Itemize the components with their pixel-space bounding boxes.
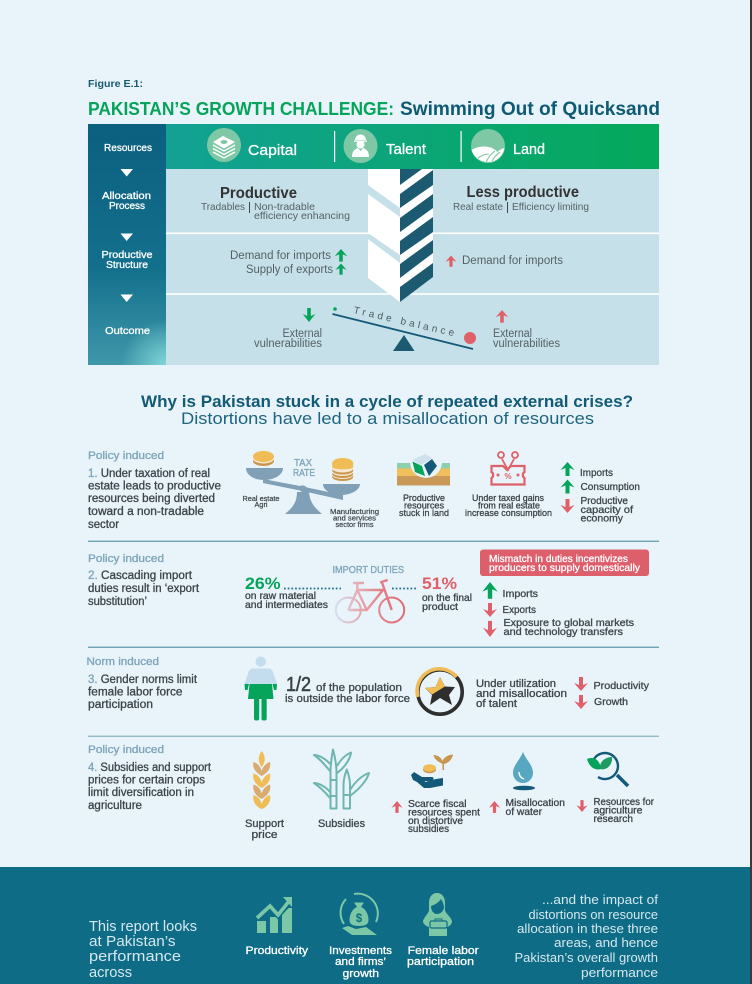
panel: section 3 gender norms bbox=[86, 656, 650, 720]
outcome: external vulnerabilities down: External bbox=[282, 328, 322, 340]
list: impacts of gender norms: Growth bbox=[594, 696, 628, 708]
label: subsidies: Subsidies bbox=[318, 818, 365, 830]
text: scarce fiscal resources: subsidies bbox=[408, 823, 449, 835]
heading: why stuck bbox=[141, 393, 633, 428]
text: gender norms description bbox=[88, 674, 198, 711]
icon: talent worker bbox=[344, 129, 378, 163]
outcome: external vulnerabilities up bbox=[493, 310, 560, 350]
icon: water drop bbox=[513, 752, 535, 790]
text: gender norms description: 3. Gender norms limit bbox=[88, 674, 198, 686]
heading: why stuck: Distortions have led to a misallocation of resources bbox=[181, 409, 594, 428]
icon: investments money bag bbox=[341, 894, 378, 935]
icon: tax rate scale: RATE bbox=[293, 467, 315, 479]
text: impact of distortions: performance bbox=[581, 966, 658, 980]
text: subsidies description: 4. Subsidies and support bbox=[88, 762, 212, 774]
text: this report looks: performance bbox=[89, 948, 181, 965]
stat: half of population: is outside the labor force bbox=[285, 693, 410, 705]
icon: tax rate scale: Manufacturing bbox=[330, 509, 379, 516]
panel: row backgrounds bbox=[166, 169, 659, 365]
text: impact of distortions bbox=[514, 893, 659, 980]
text: subsidies description: prices for certain crops bbox=[88, 774, 205, 786]
list: impacts of under taxation: Productive bbox=[580, 495, 628, 507]
text: resources for agriculture research: Resources for bbox=[594, 796, 654, 808]
heading: why stuck: Why is Pakistan stuck in a cycle of repeated external crises? bbox=[141, 393, 633, 411]
text: under taxation description: resources being diverted bbox=[88, 493, 215, 505]
list: impacts of under taxation: Consumption bbox=[580, 481, 640, 493]
text: this report looks bbox=[89, 918, 197, 981]
panel: process sidebar: Resources bbox=[104, 143, 152, 154]
label: support price bbox=[245, 818, 284, 841]
icon: investments money bag: $ bbox=[356, 913, 363, 925]
text: productive side: Non-tradable bbox=[254, 201, 315, 213]
text: this report looks: across bbox=[89, 964, 132, 981]
icon: star ring bbox=[417, 669, 462, 714]
label: investments and firms growth: growth bbox=[342, 968, 379, 980]
icon: capital money bbox=[207, 128, 241, 162]
list: impacts of gender norms bbox=[574, 677, 650, 709]
panel: process sidebar bbox=[88, 124, 166, 365]
icon: tax rate scale: sector firms bbox=[336, 522, 374, 529]
icon: land fields bbox=[471, 129, 505, 163]
text: resources for agriculture research: agriculture bbox=[594, 804, 643, 816]
stat: 26 percent bbox=[245, 574, 328, 611]
icon: bicycle bbox=[336, 580, 404, 622]
text: under utilization bbox=[476, 678, 567, 710]
icon: woman half filled bbox=[244, 656, 277, 720]
text: resources for agriculture research bbox=[576, 796, 654, 825]
callout: mismatch in duties: producers to supply domestically bbox=[489, 562, 641, 574]
icon: tax rate scale: Agri bbox=[254, 502, 268, 509]
chart: trade balance seesaw: Trade balance bbox=[352, 305, 456, 339]
text: subsidies description: agriculture bbox=[88, 800, 142, 812]
panel: process sidebar: Productive bbox=[102, 250, 153, 261]
label: female labor participation: Female labor bbox=[408, 945, 479, 957]
label: investments and firms growth: and firms’ bbox=[335, 956, 386, 968]
text: productive structure right: Demand for imports bbox=[462, 255, 563, 267]
text: impact of distortions: allocation in these three bbox=[517, 922, 658, 936]
icon: resources stuck in land: stuck in land bbox=[399, 508, 449, 519]
text: impact of distortions: Pakistan’s overall growth bbox=[514, 951, 658, 965]
tag: policy induced: Policy induced bbox=[88, 553, 164, 565]
stat: 51 percent: product bbox=[422, 602, 458, 613]
label: investments and firms growth: Investments bbox=[329, 945, 393, 957]
panel: process sidebar: Outcome bbox=[105, 326, 150, 337]
text: under taxation description: toward a non-tradable bbox=[88, 506, 204, 518]
outcome: external vulnerabilities down bbox=[254, 308, 322, 350]
text: scarce fiscal resources: Scarce fiscal bbox=[408, 798, 466, 810]
panel: footer band bbox=[0, 867, 752, 984]
text: productive structure left: Demand for imports bbox=[230, 250, 331, 262]
icon: wheat support price bbox=[253, 751, 270, 809]
title: PAKISTAN’S GROWTH CHALLENGE: bbox=[88, 99, 394, 119]
text: scarce fiscal resources: on distortive bbox=[408, 815, 463, 827]
title bbox=[88, 98, 660, 120]
label: import duties: IMPORT DUTIES bbox=[332, 565, 404, 576]
icon: female labor bbox=[423, 893, 452, 936]
icon: under taxed gains bbox=[465, 452, 552, 519]
text: impact of distortions: distortions on resource bbox=[528, 908, 658, 922]
text: misallocation of water bbox=[489, 797, 565, 818]
text: subsidies description bbox=[88, 762, 212, 812]
icon: resources stuck in land bbox=[397, 454, 450, 519]
icon: under taxed gains: increase consumption bbox=[465, 508, 552, 519]
label: productivity: Productivity bbox=[246, 945, 309, 957]
text: less productive side: Real estate bbox=[453, 201, 503, 213]
text: under utilization: and misallocation bbox=[476, 688, 567, 700]
label: female labor participation: participation bbox=[407, 956, 474, 968]
icon: tax rate scale bbox=[242, 451, 379, 529]
icon: tax rate scale: and services bbox=[333, 516, 377, 522]
panel: resources header: Land bbox=[513, 141, 545, 158]
text: misallocation of water: Misallocation bbox=[506, 797, 565, 809]
text: less productive side bbox=[453, 184, 589, 213]
text: impact of distortions: ...and the impact of bbox=[542, 893, 659, 907]
panel: resources header: Talent bbox=[386, 141, 427, 158]
text: import duties description: duties result in ‘export bbox=[88, 583, 200, 595]
list: impacts of under taxation: Imports bbox=[580, 467, 613, 479]
icon: central chevron divider bbox=[368, 169, 433, 302]
text: productive structure left bbox=[230, 249, 347, 276]
text: productive side bbox=[201, 185, 350, 222]
text: gender norms description: female labor force bbox=[88, 686, 182, 698]
label: female labor participation bbox=[407, 945, 479, 968]
outcome: external vulnerabilities down: vulnerabilities bbox=[254, 338, 322, 350]
stat: 26 percent: 26% bbox=[245, 574, 280, 593]
text: less productive side: Efficiency limiting bbox=[512, 201, 589, 213]
label: support price: price bbox=[252, 829, 278, 841]
list: impacts of import duties: Exports bbox=[502, 604, 536, 616]
text: this report looks: This report looks bbox=[89, 918, 197, 935]
tag: policy induced: Policy induced bbox=[88, 450, 164, 462]
text: import duties description: 2. Cascading import bbox=[88, 570, 193, 582]
text: under taxation description: estate leads to productive bbox=[88, 480, 221, 492]
text: scarce fiscal resources: resources spent bbox=[408, 806, 480, 818]
icon: productivity chart bbox=[257, 897, 292, 933]
icon: tax rate scale: Real estate bbox=[242, 496, 280, 503]
title: Swimming Out of Quicksand bbox=[400, 98, 660, 120]
text: productive side: Productive bbox=[220, 185, 297, 202]
icon: tax rate scale: TAX bbox=[294, 457, 312, 469]
list: impacts of import duties bbox=[482, 582, 634, 638]
outcome: external vulnerabilities up: vulnerabilities bbox=[493, 338, 560, 350]
icon: under taxed gains: from real estate bbox=[478, 500, 540, 512]
icon: resources stuck in land: Productive bbox=[403, 493, 445, 504]
stat: half of population bbox=[285, 674, 410, 705]
text: under utilization: Under utilization bbox=[476, 678, 556, 690]
list: impacts of import duties: and technology transfers bbox=[504, 626, 623, 638]
icon: under taxed gains: Under taxed gains bbox=[472, 493, 544, 504]
stat: 26 percent: and intermediates bbox=[245, 600, 328, 611]
tag: policy induced: Policy induced bbox=[88, 744, 164, 756]
list: impacts of under taxation: economy bbox=[580, 512, 624, 524]
tag: norm induced: Norm induced bbox=[86, 656, 159, 668]
label: investments and firms growth bbox=[329, 945, 393, 980]
text: under utilization: of talent bbox=[476, 698, 517, 710]
text: misallocation of water: of water bbox=[506, 806, 542, 818]
stat: half of population: 1/2 bbox=[286, 674, 311, 696]
icon: research magnifier bbox=[587, 753, 628, 786]
text: import duties description bbox=[88, 570, 200, 608]
text: under taxation description: 1. Under taxation of real bbox=[88, 468, 210, 480]
text: gender norms description: participation bbox=[88, 699, 153, 711]
callout: mismatch in duties bbox=[480, 550, 649, 576]
text: this report looks: at Pakistan’s bbox=[89, 933, 176, 950]
icon: under taxed gains: % bbox=[504, 472, 512, 481]
icon: fiscal resources hand bbox=[411, 754, 453, 788]
panel: section 1 under taxation bbox=[88, 450, 640, 531]
panel: resources header: Capital bbox=[248, 142, 297, 159]
text: import duties description: substitution’ bbox=[88, 596, 147, 608]
list: impacts of import duties: Imports bbox=[502, 588, 538, 600]
panel: resources header bbox=[166, 124, 659, 169]
icon: sugarcane subsidies bbox=[314, 750, 369, 808]
list: impacts of gender norms: Productivity bbox=[594, 680, 650, 692]
stat: 51 percent: on the final bbox=[422, 593, 472, 604]
panel: section 2 import duties bbox=[88, 550, 649, 638]
text: subsidies description: limit diversification in bbox=[88, 787, 194, 799]
panel: process sidebar: Process bbox=[109, 201, 145, 212]
text: productive side: efficiency enhancing bbox=[254, 210, 350, 222]
panel: growth challenge framework bbox=[88, 124, 659, 365]
list: impacts of under taxation: capacity of bbox=[580, 504, 633, 516]
text: impact of distortions: areas, and hence bbox=[554, 936, 658, 950]
text: resources for agriculture research: research bbox=[594, 813, 633, 825]
stat: 26 percent: on raw material bbox=[245, 591, 316, 602]
text: under taxation description: sector bbox=[88, 519, 119, 531]
icon: resources stuck in land: resources bbox=[404, 500, 444, 512]
label: support price: Support bbox=[245, 818, 284, 830]
list: impacts of import duties: Exposure to global markets bbox=[504, 617, 634, 629]
stat: 51 percent: 51% bbox=[422, 574, 457, 593]
list: impacts of under taxation bbox=[560, 462, 640, 524]
stat: half of population: of the population bbox=[316, 682, 402, 694]
outcome: external vulnerabilities up: External bbox=[493, 328, 532, 340]
text: under taxation description bbox=[88, 468, 221, 531]
panel: process sidebar: Structure bbox=[106, 260, 148, 271]
panel: section 4 subsidies bbox=[88, 744, 654, 841]
panel: process sidebar: Allocation bbox=[102, 191, 151, 202]
text: productive side: Tradables bbox=[201, 201, 245, 213]
stat: 51 percent bbox=[422, 574, 472, 613]
text: scarce fiscal resources bbox=[391, 798, 480, 835]
text: less productive side: Less productive bbox=[466, 184, 579, 201]
figure label: Figure E.1: bbox=[88, 78, 143, 90]
callout: mismatch in duties: Mismatch in duties incentivizes bbox=[489, 553, 628, 565]
text: productive structure left: Supply of exports bbox=[246, 264, 333, 276]
chart: trade balance seesaw bbox=[332, 305, 476, 351]
